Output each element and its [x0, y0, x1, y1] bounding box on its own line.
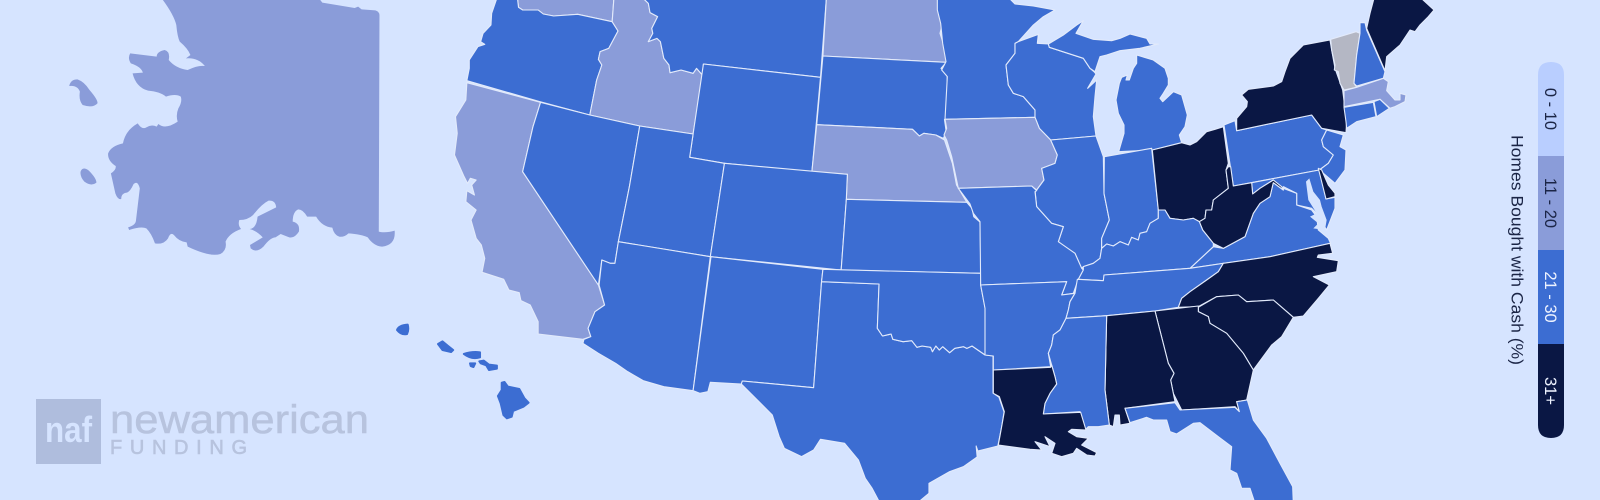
state: Wisconsin — [1006, 34, 1097, 140]
state: West Virginia — [1199, 167, 1283, 248]
legend label: 21-30: 21 - 30 — [1541, 271, 1559, 323]
state: Mississippi — [1043, 316, 1109, 430]
logo subtitle: FUNDING — [110, 437, 247, 459]
state: Montana — [643, 0, 826, 77]
legend label: 31+: 31+ — [1541, 377, 1559, 405]
state: Florida — [1125, 400, 1293, 500]
state: New Hampshire — [1354, 23, 1385, 86]
state: New Jersey — [1319, 130, 1346, 183]
state: Washington — [517, 0, 614, 22]
state: Minnesota — [937, 0, 1055, 119]
state: South Carolina — [1198, 295, 1293, 370]
state: Georgia — [1155, 306, 1253, 412]
legend title: Homes Bought with Cash (%) — [1508, 135, 1526, 365]
Chesapeake Bay — [1306, 178, 1327, 230]
state: Oregon — [467, 0, 618, 115]
legend swatch: 21-30 — [1538, 250, 1564, 344]
state: Indiana — [1102, 148, 1158, 248]
state: North Dakota — [823, 0, 946, 62]
state: Rhode Island — [1374, 99, 1389, 117]
state: Utah — [618, 126, 724, 257]
state: Nebraska — [812, 125, 967, 202]
legend label: 0-10: 0 - 10 — [1541, 88, 1559, 130]
logo square — [36, 399, 101, 464]
state: Pennsylvania — [1224, 115, 1333, 186]
state: Arizona — [583, 242, 710, 391]
state: Iowa — [944, 117, 1057, 190]
legend swatch: 31+ — [1538, 344, 1564, 438]
state: New Mexico — [693, 257, 823, 393]
state: Nevada — [523, 102, 640, 285]
legend label: 11-20: 11 - 20 — [1541, 178, 1559, 228]
state: Hawaii — [397, 325, 529, 418]
logo monogram: naf — [45, 409, 93, 450]
state: Texas — [741, 282, 1004, 500]
state: Idaho — [590, 0, 702, 134]
logo wordmark: newamerican — [110, 398, 369, 442]
western states — [454, 0, 1004, 500]
state: Kansas — [841, 199, 981, 273]
state: Louisiana — [993, 365, 1097, 457]
state: Ohio — [1152, 127, 1228, 222]
state: Arkansas — [981, 282, 1075, 370]
state: Alabama — [1105, 311, 1175, 427]
state: Connecticut — [1344, 102, 1376, 128]
legend swatch: 11-20 — [1538, 156, 1564, 250]
state: South Dakota — [817, 56, 947, 138]
legend — [1538, 62, 1564, 438]
state: Colorado — [710, 163, 847, 270]
state: Virginia — [1190, 183, 1331, 268]
state: Tennessee — [1066, 263, 1223, 318]
state: Maryland — [1252, 170, 1335, 230]
state: Vermont — [1331, 32, 1360, 90]
state: Wyoming — [690, 64, 821, 172]
state: California — [454, 83, 605, 339]
central and eastern states — [937, 0, 1434, 500]
state: New York — [1237, 40, 1347, 133]
state: Michigan — [1048, 21, 1187, 152]
logo: New American Funding — [36, 398, 369, 464]
legend swatch: 0-10 — [1538, 62, 1564, 156]
state: North Carolina — [1178, 243, 1338, 317]
state: Missouri — [958, 186, 1083, 295]
state: Massachusetts — [1344, 78, 1406, 108]
state: Kentucky — [1078, 210, 1213, 281]
state: Delaware — [1318, 168, 1335, 199]
state: Maine — [1367, 0, 1434, 71]
state: Illinois — [1035, 136, 1109, 268]
state: Oklahoma — [822, 269, 985, 355]
state: Alaska — [69, 0, 395, 255]
